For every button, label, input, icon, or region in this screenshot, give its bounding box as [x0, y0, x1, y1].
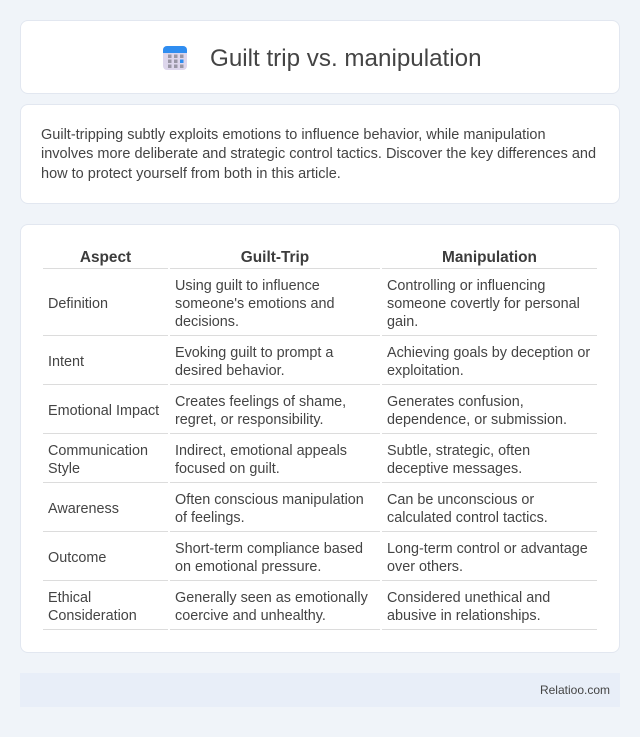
row: Ethical Consideration [48, 590, 550, 624]
column headings: Aspect [80, 249, 131, 266]
row: Intent: exploitation. [387, 363, 464, 379]
row: Outcome: on emotional pressure. [175, 559, 321, 575]
header card [20, 20, 620, 94]
row: Emotional Impact: Generates confusion, [387, 394, 524, 410]
row: Outcome: over others. [387, 559, 463, 575]
row: Definition: gain. [387, 314, 418, 330]
row: Ethical Consideration: Considered unethical and [387, 590, 550, 606]
row: Communication Style [48, 443, 530, 477]
row: Intent: Achieving goals by deception or [387, 345, 590, 361]
row: Outcome: Outcome [48, 550, 106, 566]
row: Ethical Consideration: Ethical [48, 590, 91, 606]
row: Outcome: Short-term compliance based [175, 541, 363, 557]
row: Intent: Evoking guilt to prompt a [175, 345, 333, 361]
title: Guilt trip vs. manipulation [210, 45, 482, 72]
footer bar [20, 673, 620, 707]
row: Emotional Impact [48, 394, 567, 428]
row: Emotional Impact: dependence, or submission. [387, 412, 567, 428]
row: Emotional Impact: Creates feelings of shame, [175, 394, 346, 410]
row: Awareness [48, 492, 548, 526]
row: Emotional Impact: Emotional Impact [48, 403, 159, 419]
row: Communication Style: focused on guilt. [175, 461, 280, 477]
intro text: involves more deliberate and strategic control tactics. Discover the key differences and [41, 146, 596, 162]
row: Communication Style: Communication [48, 443, 148, 459]
row: Definition [48, 278, 580, 330]
row: Communication Style: Indirect, emotional appeals [175, 443, 347, 459]
row: Awareness: calculated control tactics. [387, 510, 548, 526]
row: Awareness: Often conscious manipulation [175, 492, 364, 508]
intro text: how to protect yourself from both in this article. [41, 166, 341, 182]
row: Definition: someone covertly for personal [387, 296, 580, 312]
row: Definition: decisions. [175, 314, 239, 330]
intro text: Guilt-tripping subtly exploits emotions to influence behavior, while manipulation [41, 126, 546, 142]
intro card [20, 104, 620, 204]
row: Outcome: Long-term control or advantage [387, 541, 588, 557]
row: Ethical Consideration: coercive and unhealthy. [175, 608, 326, 624]
icon: calendar [163, 46, 187, 70]
intro text [41, 126, 596, 182]
row: Intent: desired behavior. [175, 363, 285, 379]
row: Awareness: of feelings. [175, 510, 245, 526]
row: Awareness: Can be unconscious or [387, 492, 534, 508]
row: Definition: Using guilt to influence [175, 278, 320, 294]
row: Definition: Definition [48, 296, 108, 312]
row: Communication Style: deceptive messages. [387, 461, 522, 477]
row: Emotional Impact: regret, or responsibility. [175, 412, 324, 428]
row: Ethical Consideration: Generally seen as emotionally [175, 590, 368, 606]
row: Communication Style: Subtle, strategic, often [387, 443, 530, 459]
row: Ethical Consideration: abusive in relationships. [387, 608, 541, 624]
column headings: Manipulation [442, 249, 537, 266]
row: Definition: Controlling or influencing [387, 278, 545, 294]
column headings: Guilt-Trip [241, 249, 309, 266]
row: Definition: someone's emotions and [175, 296, 335, 312]
row: Outcome [48, 541, 588, 575]
row: Intent [48, 345, 590, 379]
row: Awareness: Awareness [48, 501, 119, 517]
row: Ethical Consideration: Consideration [48, 608, 137, 624]
table card [20, 224, 620, 653]
footer credit: Relatioo.com [540, 683, 610, 697]
column headings [80, 249, 537, 266]
row: Intent: Intent [48, 354, 84, 370]
row: Communication Style: Style [48, 461, 80, 477]
